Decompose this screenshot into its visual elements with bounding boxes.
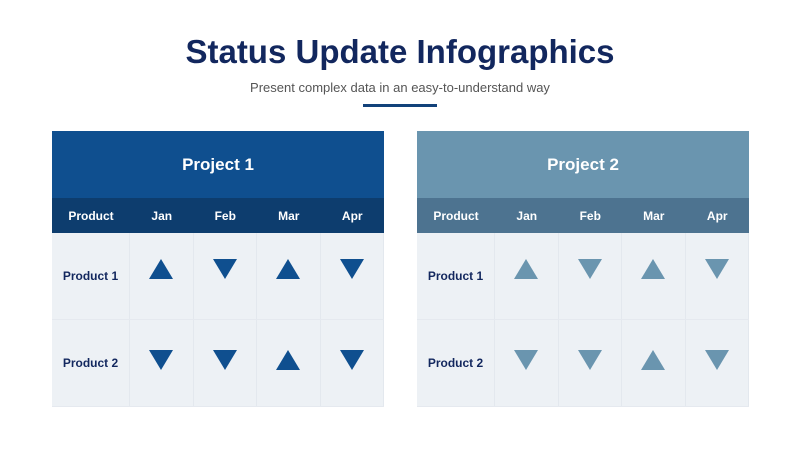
panel: project 1 [52, 131, 384, 407]
row: product 2: Product 2 [63, 356, 118, 370]
subtitle: Present complex data in an easy-to-understand way [250, 80, 550, 95]
column headers [52, 198, 384, 233]
row: product 1: Product 1 [428, 269, 483, 283]
column headers: Product [68, 208, 114, 222]
row: product 2: Product 2 [428, 356, 483, 370]
column headers: Apr [707, 208, 728, 222]
column headers: Apr [342, 208, 363, 222]
column headers: Jan [516, 208, 537, 222]
column headers: Product [433, 208, 479, 222]
row: product 1: Product 1 [63, 269, 118, 283]
header: project 2 [417, 131, 749, 198]
column headers: Feb [215, 208, 236, 222]
title: Status Update Infographics [185, 33, 615, 70]
column headers: Feb [580, 208, 601, 222]
header: project 2: Project 2 [547, 155, 619, 174]
column headers: Jan [151, 208, 172, 222]
row: product 2 [417, 320, 749, 407]
row: product 1 [52, 233, 384, 320]
header: project 1 [52, 131, 384, 198]
header: project 1: Project 1 [182, 155, 254, 174]
column headers: Mar [278, 208, 299, 222]
panel: project 2 [417, 131, 749, 407]
row: product 1 [417, 233, 749, 320]
column headers [417, 198, 749, 233]
column headers: Mar [643, 208, 664, 222]
row: product 2 [52, 320, 384, 407]
